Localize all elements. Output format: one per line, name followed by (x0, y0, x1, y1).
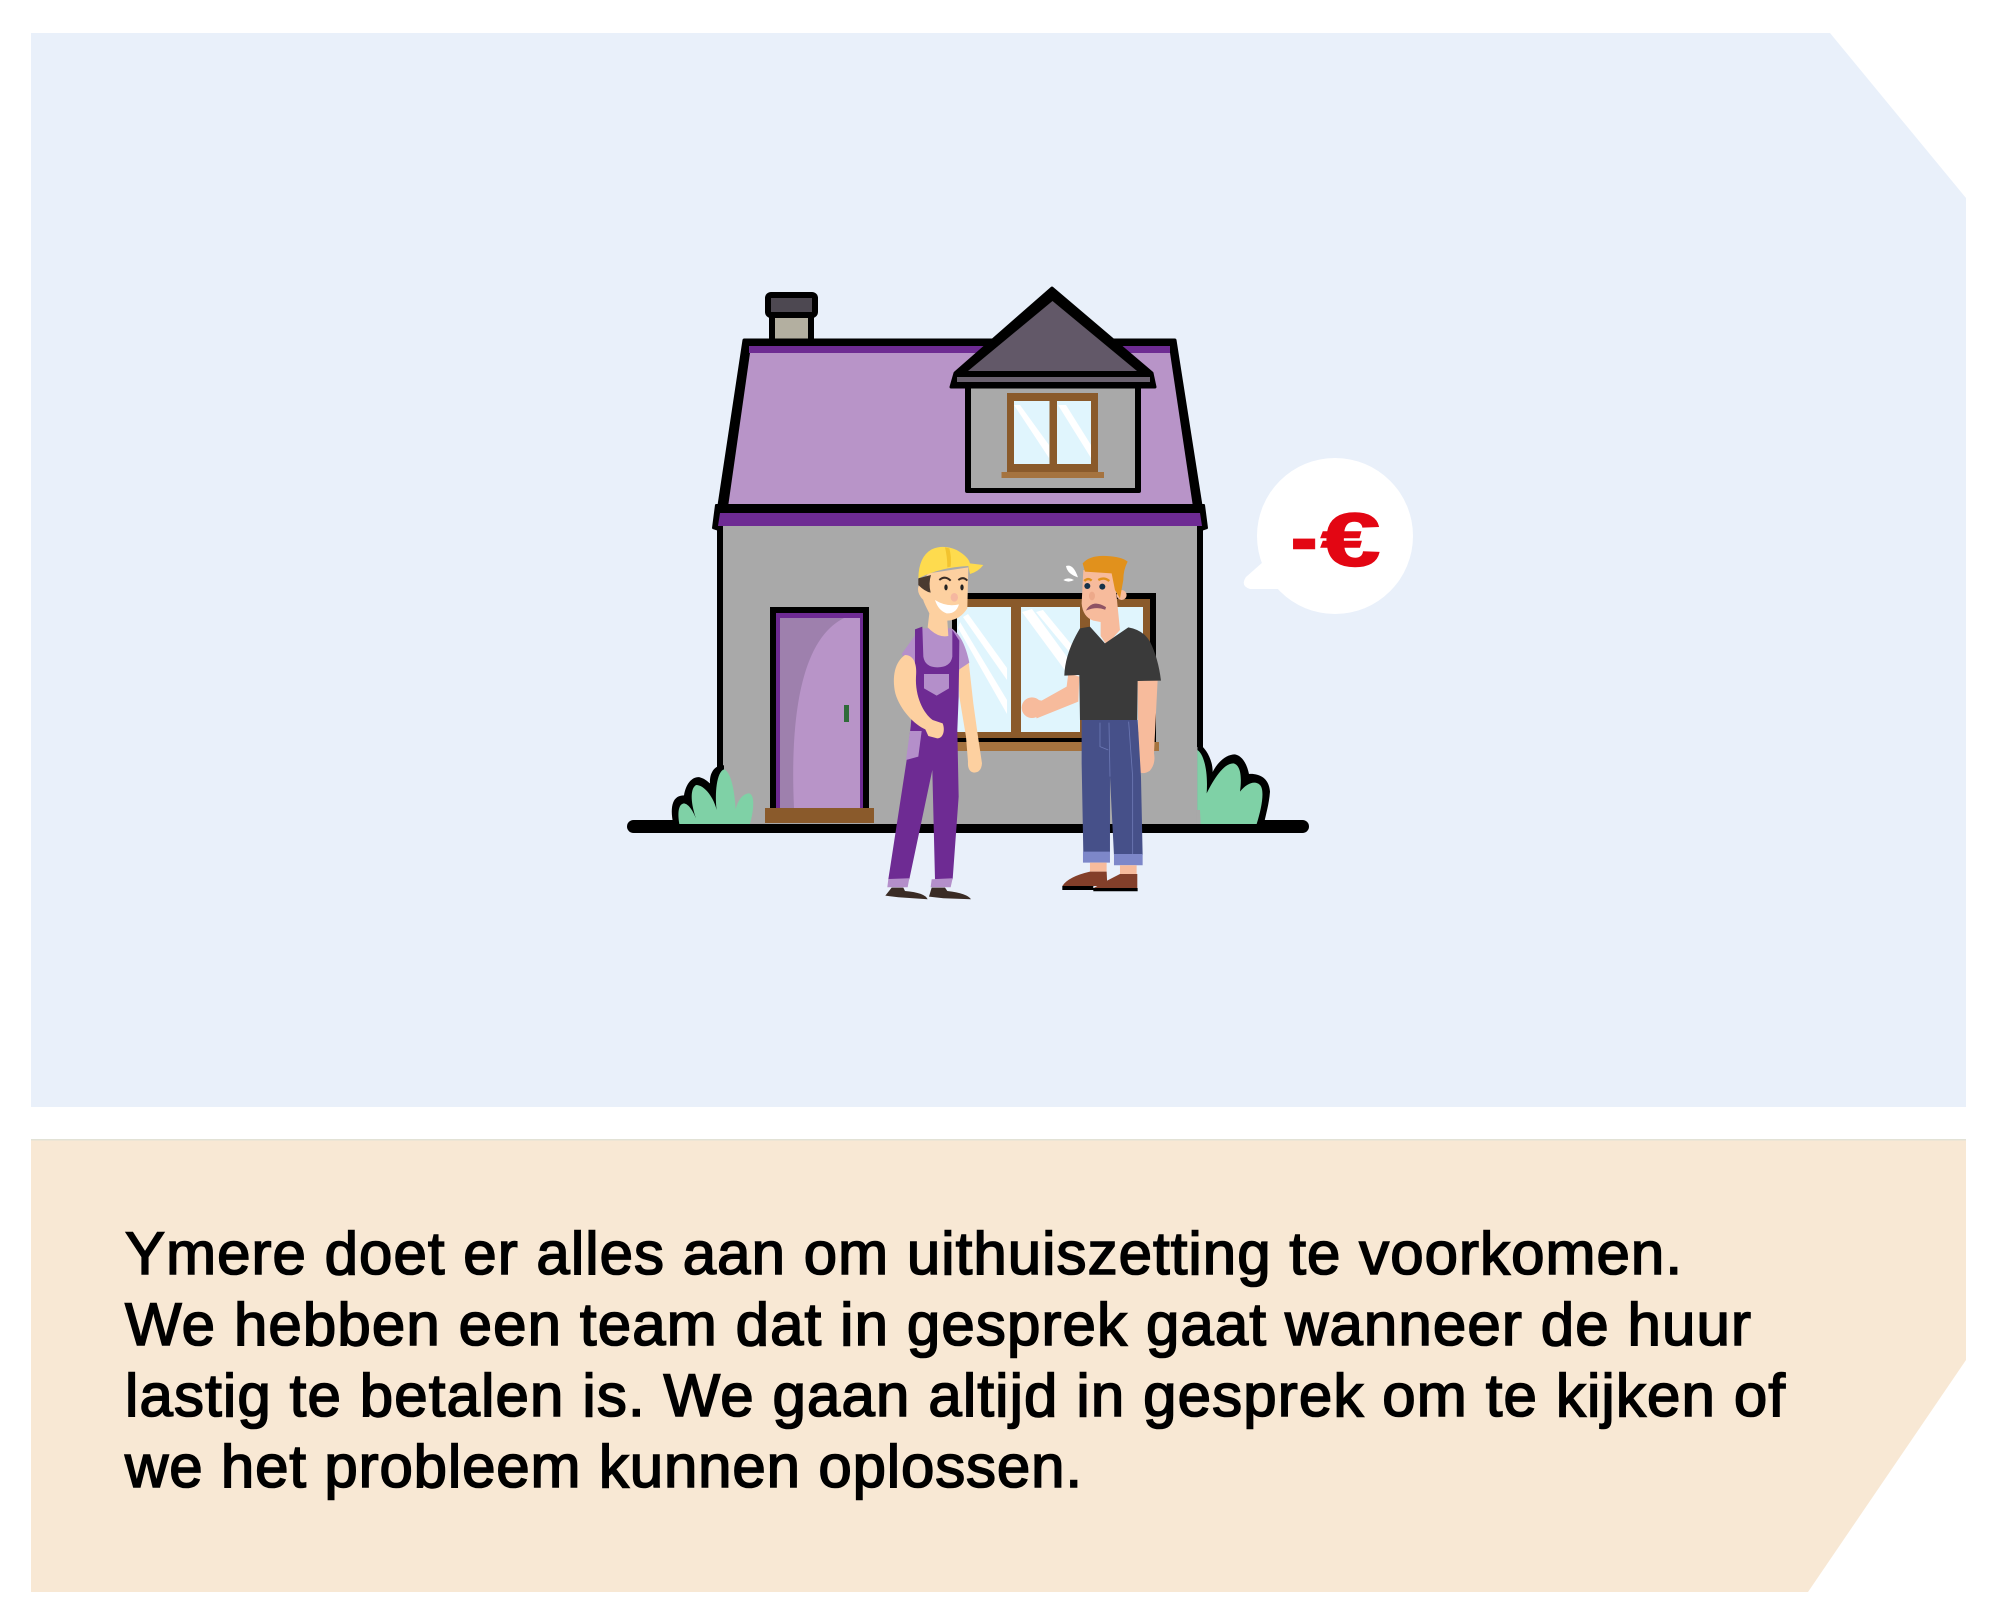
hair (1083, 556, 1128, 598)
cuffs (887, 878, 953, 887)
surprise marks (1063, 566, 1078, 582)
line 2: We hebben een team dat in gesprek gaat wanneer de huur (125, 1291, 1751, 1358)
trousers (1082, 720, 1143, 855)
panel: text background (31, 1139, 1966, 1592)
helmet (918, 547, 983, 578)
text block (124, 1220, 1785, 1500)
near arm (894, 655, 944, 738)
illustration: house scene (627, 288, 1413, 899)
cuffs (1083, 852, 1143, 865)
face (935, 578, 967, 613)
line 4: we het probleem kunnen oplossen. (124, 1433, 1082, 1500)
neck and head (1082, 570, 1120, 645)
minus euro label: € (1321, 498, 1380, 582)
shirt (1064, 627, 1161, 720)
chimney (765, 292, 818, 344)
neck and head (918, 567, 968, 636)
side pocket (906, 731, 922, 760)
big window (952, 593, 1159, 751)
raised arm (1022, 673, 1079, 718)
ground line (627, 820, 1309, 833)
shoes (885, 888, 971, 899)
line 3: lastig te betalen is. We gaan altijd in gesprek om te kijken of (125, 1362, 1785, 1429)
man in dark shirt (1022, 556, 1161, 891)
minus euro label (1290, 490, 1380, 585)
dormer (951, 288, 1155, 493)
line 1: Ymere doet er alles aan om uithuiszetting te voorkomen. (125, 1220, 1682, 1287)
speech bubble (1244, 458, 1413, 614)
door (765, 607, 874, 823)
worker with yellow helmet (885, 547, 983, 899)
trousers and bib (888, 627, 959, 879)
bush right (1197, 742, 1270, 824)
bib pocket (924, 674, 949, 696)
hair (918, 575, 931, 593)
shoes (1062, 872, 1138, 891)
eave (713, 505, 1207, 532)
icon: house (713, 288, 1207, 824)
far arm (958, 662, 982, 773)
ankles (1090, 863, 1137, 874)
roof (718, 340, 1202, 512)
bush left (672, 765, 753, 824)
face (1084, 579, 1109, 610)
panel: illustration background (31, 33, 1966, 1107)
minus euro label: - (1290, 490, 1318, 585)
shirt (902, 628, 969, 703)
wall (717, 520, 1203, 824)
hanging arm (1132, 680, 1158, 773)
